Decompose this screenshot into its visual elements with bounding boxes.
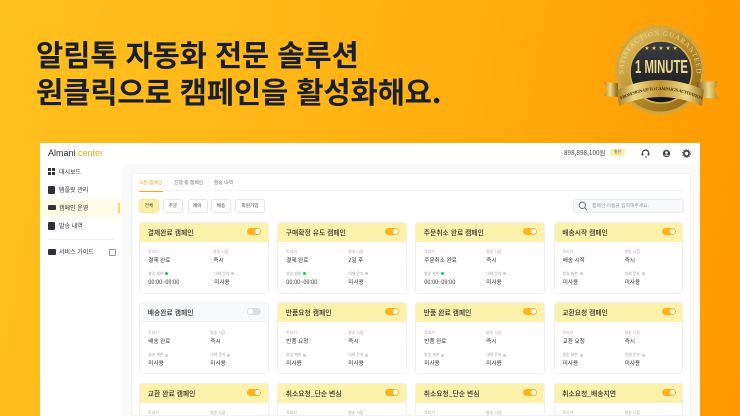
filter chips bbox=[139, 199, 265, 213]
badge text: SATISFACTION GUARANTEED bbox=[618, 30, 701, 74]
card: 반품 완료: 미사용 bbox=[486, 359, 502, 367]
card: 반품 완료 bbox=[415, 302, 545, 374]
card: 배송시작: 즉시 bbox=[625, 256, 635, 264]
card: 배송완료 (off): 배송완료 캠페인 bbox=[148, 307, 193, 317]
card: 주문취소: 미사용 bbox=[486, 278, 502, 286]
icon: settings bbox=[682, 149, 691, 158]
title: 알림톡 자동화 전문 솔루션 bbox=[36, 32, 359, 75]
card: 반품요청: 즉시 bbox=[348, 337, 359, 345]
menu: campaign active bbox=[40, 199, 122, 217]
card: 교환요청 bbox=[554, 302, 683, 374]
card: 구매확정: 발송 제한 bbox=[286, 272, 301, 276]
card: 반품 완료: 반품 완료 bbox=[424, 337, 446, 345]
card: 배송시작: 배송 시작 bbox=[563, 256, 585, 264]
card: 교환요청: 발송 시점 bbox=[625, 331, 640, 336]
menu: campaign active: 캠페인 운영 bbox=[59, 203, 88, 212]
card: 반품 완료: 대체 문자 bbox=[486, 353, 501, 358]
card: 배송완료 (off): 발송 시점 bbox=[210, 331, 225, 336]
card: 취소요청 단순 변심 bbox=[277, 383, 407, 416]
card: 반품요청: 반품요청 캠페인 bbox=[286, 307, 331, 317]
card: 결제완료 bbox=[139, 222, 269, 294]
menu: templates: 템플릿 관리 bbox=[59, 185, 88, 194]
card: 교환요청: 교환요청 캠페인 bbox=[562, 307, 608, 317]
card: 주문취소: 트리거 bbox=[424, 250, 435, 254]
card: 반품 완료: 트리거 bbox=[424, 331, 435, 336]
card: 취소요청 단순 변심 2 bbox=[415, 383, 545, 416]
tabs: 모든 캠페인 bbox=[139, 179, 162, 186]
card: 주문취소: 주문취소 완료 bbox=[424, 256, 457, 264]
card: 구매확정: 2일 후 bbox=[348, 256, 363, 264]
card: 구매확정: 구매확정 유도 캠페인 bbox=[286, 226, 346, 236]
icon: headset bbox=[641, 149, 650, 158]
menu: service guide bbox=[48, 247, 116, 256]
card: 교환요청: 미사용 bbox=[625, 359, 640, 367]
tabs: 발송 내역 bbox=[214, 179, 233, 186]
card: 반품 완료: 발송 제한 bbox=[424, 353, 439, 358]
charge button bbox=[610, 149, 625, 156]
card: 배송시작: 트리거 bbox=[563, 250, 573, 254]
card: 구매확정 bbox=[277, 222, 407, 294]
card: 배송완료 (off): 미사용 bbox=[210, 359, 226, 367]
card: 구매확정: 00:00~09:00 bbox=[286, 278, 317, 286]
balance: 898,898,100원 bbox=[564, 148, 605, 157]
card: 주문취소: 대체 문자 bbox=[486, 272, 501, 276]
sidebar menu bbox=[40, 167, 122, 230]
card: 구매확정: 트리거 bbox=[286, 250, 297, 254]
card: 결제완료: 대체 문자 bbox=[214, 272, 229, 276]
menu: service guide: 서비스 가이드 bbox=[59, 247, 94, 256]
card: 반품요청: 반품 요청 bbox=[286, 337, 308, 345]
card: 결제완료: 발송 시점 bbox=[213, 250, 228, 254]
card: 결제완료: 결제완료 캠페인 bbox=[148, 226, 193, 236]
card: 취소요청 단순 변심 2: 취소요청_단순 변심 bbox=[424, 388, 480, 398]
card: 결제완료: 00:00~09:00 bbox=[148, 278, 179, 286]
ribbon: FROM SIGN-UP TO CAMPAIGN ACTIVATION bbox=[620, 87, 703, 100]
tabs bbox=[139, 178, 684, 191]
card: 반품 완료: 발송 시점 bbox=[486, 331, 501, 336]
icon: gold guarantee badge bbox=[604, 24, 718, 116]
card: 반품요청: 발송 제한 bbox=[286, 353, 301, 358]
card: 반품요청: 트리거 bbox=[286, 331, 297, 336]
card: 배송완료 (off): 트리거 bbox=[148, 331, 159, 336]
card: 반품 완료: 반품 완료 캠페인 bbox=[424, 307, 471, 317]
card: 교환요청: 발송 제한 bbox=[563, 353, 578, 358]
card: 배송시작: 미사용 bbox=[625, 278, 640, 286]
title: 원클릭으로 캠페인을 활성화해요. bbox=[36, 69, 441, 112]
text: 회원가입 bbox=[242, 203, 258, 209]
card: 교환요청: 미사용 bbox=[563, 359, 578, 367]
card: 주문취소: 즉시 bbox=[486, 256, 497, 264]
card: 배송시작: 대체 문자 bbox=[625, 272, 640, 276]
card: 주문취소: 00:00~09:00 bbox=[424, 278, 455, 286]
card: 반품요청 bbox=[277, 302, 407, 374]
panel: content background bbox=[122, 164, 700, 416]
card: 구매확정: 결제 완료 bbox=[286, 256, 308, 264]
card: 교환요청: 트리거 bbox=[563, 331, 573, 336]
card: 구매확정: 미사용 bbox=[348, 278, 364, 286]
card: 배송완료 (off) bbox=[139, 302, 269, 374]
menu: dashboard: 대시보드 bbox=[59, 167, 81, 176]
card: 배송완료 (off): 배송 완료 bbox=[148, 337, 170, 345]
card: 교환요청: 대체 문자 bbox=[625, 353, 640, 358]
card: 주문취소: 발송 시점 bbox=[486, 250, 501, 254]
seal bbox=[614, 24, 706, 116]
card: 배송시작 bbox=[554, 222, 683, 294]
card: 반품요청: 미사용 bbox=[286, 359, 302, 367]
card: 반품요청: 대체 문자 bbox=[348, 353, 363, 358]
card: 결제완료: 결제 완료 bbox=[148, 256, 170, 264]
card: 주문취소 bbox=[415, 222, 545, 294]
card: 배송시작: 발송 제한 bbox=[563, 272, 578, 276]
panel: campaign list bbox=[131, 173, 691, 416]
panel: app window bbox=[40, 143, 700, 416]
text: 주문 bbox=[169, 203, 177, 209]
search box: 캠페인 이름을 입력해주세요. bbox=[592, 202, 649, 209]
card: 반품요청: 발송 시점 bbox=[348, 331, 363, 336]
card: 결제완료: 즉시 bbox=[213, 256, 224, 264]
icon: user bbox=[662, 150, 670, 158]
card: 주문취소: 주문취소 완료 캠페인 bbox=[424, 226, 484, 236]
card: 결제완료: 트리거 bbox=[148, 250, 159, 254]
text: 배송 bbox=[217, 203, 225, 209]
card: 교환 완료: 교환 완료 캠페인 bbox=[148, 388, 195, 398]
tabs: 진행 중 캠페인 bbox=[174, 179, 203, 186]
card: 반품 완료: 미사용 bbox=[424, 359, 440, 367]
text: 전체 bbox=[145, 203, 153, 209]
card: 취소요청 배송지연: 취소요청_배송지연 bbox=[562, 388, 616, 398]
card: 배송완료 (off): 미사용 bbox=[148, 359, 164, 367]
card: 반품요청: 미사용 bbox=[348, 359, 364, 367]
card: 결제완료: 미사용 bbox=[214, 278, 230, 286]
card: 교환요청: 즉시 bbox=[625, 337, 635, 345]
card: 배송완료 (off): 발송 제한 bbox=[148, 353, 163, 358]
card: 배송시작: 배송시작 캠페인 bbox=[562, 226, 608, 236]
card: 배송시작: 미사용 bbox=[563, 278, 578, 286]
card: 배송시작: 발송 시점 bbox=[625, 250, 640, 254]
text: 배아 bbox=[193, 203, 202, 209]
card: 교환요청: 교환 요청 bbox=[563, 337, 585, 345]
menu: history: 발송 내역 bbox=[59, 221, 83, 230]
menu: dashboard bbox=[48, 167, 81, 176]
title bbox=[36, 32, 441, 112]
icon: search bbox=[578, 202, 588, 210]
logo: Almani.center bbox=[48, 148, 103, 158]
card: 취소요청 단순 변심: 취소요청_단순 변심 bbox=[286, 388, 342, 398]
card: 구매확정: 발송 시점 bbox=[348, 250, 363, 254]
card: 취소요청 배송지연 bbox=[554, 383, 683, 416]
card: 구매확정: 대체 문자 bbox=[348, 272, 363, 276]
menu: history bbox=[48, 221, 83, 230]
card: 교환 완료 bbox=[139, 383, 269, 416]
badge text: 1 MINUTE bbox=[635, 57, 688, 77]
card: 배송완료 (off): 대체 문자 bbox=[210, 353, 225, 358]
charge button: 충전 bbox=[614, 150, 621, 155]
badge text: ★ ★ ★ ★ ★ bbox=[644, 45, 678, 52]
card: 주문취소: 발송 제한 bbox=[424, 272, 439, 276]
card: 결제완료: 발송 제한 bbox=[148, 272, 163, 276]
card: 배송완료 (off): 즉시 bbox=[210, 337, 221, 345]
card: 반품 완료: 즉시 bbox=[486, 337, 497, 345]
search box bbox=[573, 199, 684, 213]
